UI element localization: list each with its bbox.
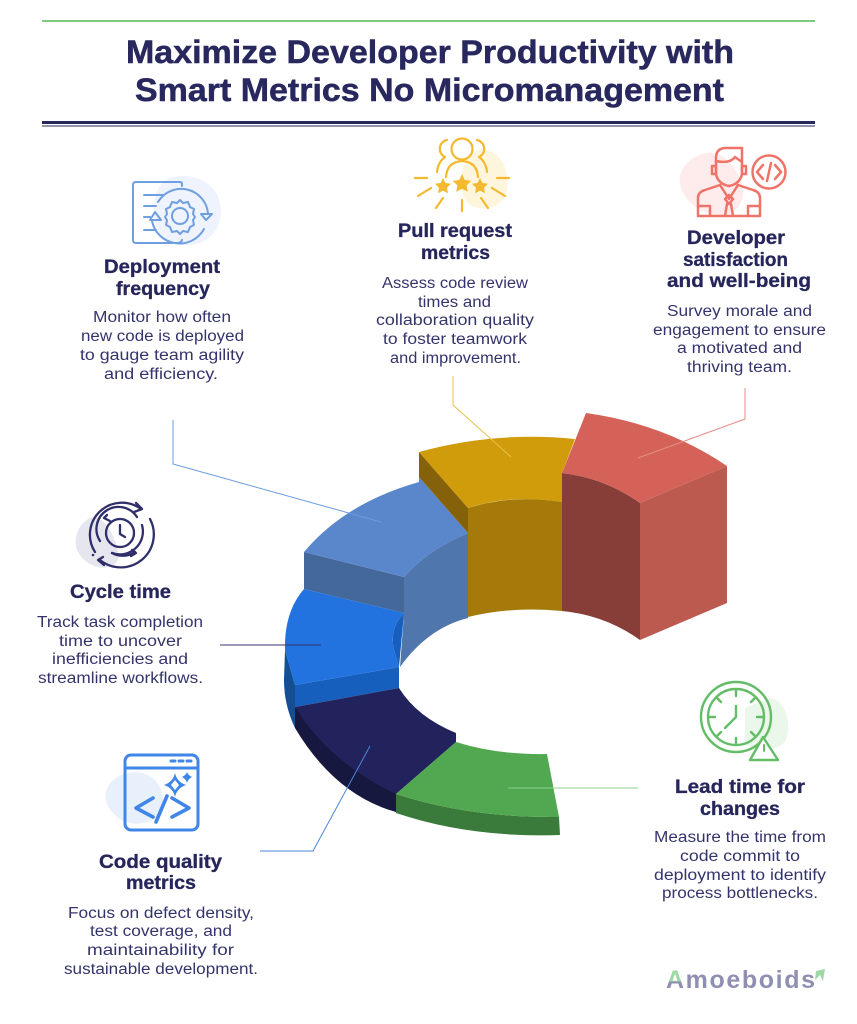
heading — [398, 221, 513, 264]
body text: Measure the time from — [654, 829, 826, 846]
segment: deployment frequency (light blue) — [304, 477, 468, 667]
heading — [667, 228, 811, 292]
heading — [675, 777, 806, 820]
heading: Cycle time — [70, 582, 171, 603]
leader line: developer satisfaction — [638, 388, 745, 458]
segment: lead time for changes (green) — [396, 742, 560, 835]
segment: pull request metrics (yellow) — [419, 437, 575, 617]
body text: engagement to ensure — [653, 322, 826, 339]
body text: and efficiency. — [104, 366, 218, 383]
body text — [653, 303, 826, 376]
body text: new code is deployed — [81, 328, 244, 345]
heading: Lead time for — [675, 777, 806, 798]
heading: metrics — [126, 873, 196, 894]
body text: time to uncover — [59, 633, 182, 650]
body text: Survey morale and — [667, 303, 812, 320]
body text: streamline workflows. — [38, 670, 203, 687]
segment: code quality metrics (navy) — [295, 688, 456, 812]
body text: and improvement. — [390, 350, 521, 367]
panel: developer satisfaction and well-being — [653, 148, 826, 376]
body text — [64, 905, 258, 978]
body text: collaboration quality — [376, 312, 534, 329]
heading: Deployment — [104, 257, 221, 278]
body text — [376, 275, 534, 367]
heading: Pull request — [398, 221, 513, 242]
body text: to gauge team agility — [80, 347, 244, 364]
leader line: cycle time — [220, 644, 321, 646]
title: Smart Metrics No Micromanagement — [135, 72, 724, 108]
logo: Amoeboids: Amoeboids — [666, 966, 815, 994]
title — [126, 34, 734, 108]
segment: cycle time (bright blue) — [284, 589, 404, 728]
body text: inefficiencies and — [52, 651, 188, 668]
heading: frequency — [116, 279, 210, 300]
icon: team with stars — [415, 138, 509, 211]
heading: Developer — [687, 228, 786, 249]
icon: clock with warning triangle — [701, 682, 788, 760]
heading: metrics — [421, 243, 490, 264]
leader line: code quality — [260, 746, 370, 851]
leader line: deployment — [173, 420, 381, 522]
panel: cycle time — [37, 503, 203, 687]
body text: thriving team. — [687, 359, 792, 376]
leader line: pull request — [453, 376, 511, 457]
heading: satisfaction — [683, 250, 788, 271]
icon: clock with cycle arrows — [76, 503, 154, 568]
body text: to foster teamwork — [383, 331, 527, 348]
panel: deployment frequency — [80, 176, 244, 383]
body text: test coverage, and — [90, 923, 232, 940]
panel: lead time for changes — [654, 682, 826, 902]
3D segmented ring chart — [284, 413, 727, 835]
heading — [99, 852, 222, 894]
panel: code quality metrics — [64, 755, 258, 978]
body text: maintainability for — [87, 942, 234, 959]
leader line: lead time — [508, 787, 638, 789]
body text: Track task completion — [37, 614, 203, 631]
body text — [37, 614, 203, 687]
body text: code commit to — [680, 848, 800, 865]
icon: document with gear — [133, 176, 221, 245]
body text — [654, 829, 826, 902]
segment: developer satisfaction (red) — [562, 413, 727, 640]
body text: Focus on defect density, — [68, 905, 254, 922]
body text: times and — [418, 294, 491, 311]
body text: process bottlenecks. — [662, 885, 818, 902]
body text: deployment to identify — [654, 867, 826, 884]
icon: developer with code badge — [680, 148, 786, 216]
heading — [104, 257, 221, 300]
panel: pull request metrics — [376, 138, 534, 367]
heading: changes — [700, 799, 780, 820]
heading: and well-being — [667, 271, 811, 292]
heading: Code quality — [99, 852, 222, 873]
body text — [80, 309, 244, 383]
body text: sustainable development. — [64, 961, 258, 978]
title: Maximize Developer Productivity with — [126, 34, 734, 70]
body text: a motivated and — [677, 340, 802, 357]
body text: Assess code review — [382, 275, 529, 292]
body text: Monitor how often — [93, 309, 231, 326]
icon: code window with sparkles — [106, 755, 198, 830]
